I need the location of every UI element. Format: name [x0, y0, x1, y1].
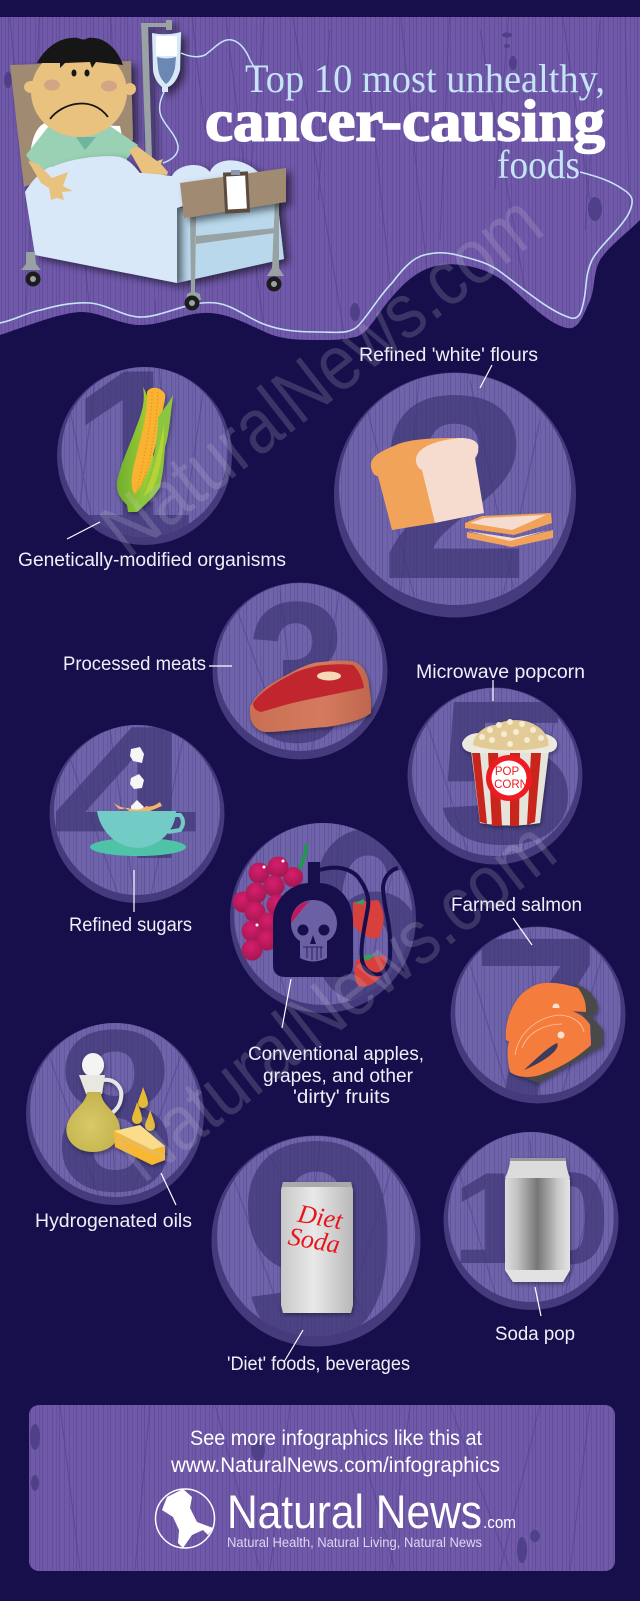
circle 2: refined flours bread: 2: [380, 341, 530, 634]
icon: oil bottle and butter: [66, 1053, 165, 1165]
leader line: [209, 665, 232, 667]
leader line: [133, 870, 135, 912]
circle 6: dirty fruits: [230, 823, 422, 1107]
icon: pillow: [30, 123, 127, 160]
call to action: [170, 1427, 500, 1477]
label: Genetically-modified organisms: [18, 550, 286, 571]
front steak: [508, 1008, 591, 1077]
label: 'Diet' foods, beverages: [227, 1354, 410, 1375]
wordmark: Natural News: [227, 1485, 482, 1538]
label: Microwave popcorn: [416, 662, 585, 683]
icon: strawberries: [353, 899, 386, 987]
label: Soda pop: [495, 1324, 575, 1345]
icon: arms and hands: [28, 146, 168, 200]
circle 3: processed meats: [64, 582, 388, 760]
circle 1: GMO corn: 1: [70, 318, 195, 592]
wavy tube line: [0, 172, 632, 332]
circle 6: dirty fruits: 6: [303, 778, 428, 1052]
watermark top: NaturalNews.com: [84, 177, 558, 573]
call to action: See more infographics like this at: [190, 1427, 482, 1450]
icon: clipboard: [223, 170, 250, 214]
notch: [524, 1043, 558, 1070]
icon: hair: [37, 38, 123, 68]
circle 9: diet foods: 9: [238, 1083, 398, 1401]
circle 2: refined flours bread: [334, 347, 576, 618]
leader line: [480, 365, 492, 388]
back steak: [575, 984, 598, 1022]
leader line: [67, 522, 100, 539]
icon: corn: [117, 387, 173, 512]
leader line: [535, 1287, 541, 1316]
call to action: www.NaturalNews.com/infographics: [170, 1454, 500, 1477]
logo: [156, 1485, 516, 1550]
icon: diet soda can: [281, 1182, 353, 1313]
icon: poison bottle with skull: [273, 862, 398, 977]
title line 3: foods: [497, 142, 580, 187]
leader line: [513, 918, 532, 945]
icon: globe: [156, 1489, 214, 1548]
header panel: [0, 17, 640, 340]
icon: butter: [114, 1131, 165, 1165]
wordmark suffix: .com: [483, 1513, 516, 1532]
label: Conventional apples,: [248, 1044, 424, 1065]
icon: grapes: [232, 846, 306, 960]
icon: skull: [291, 900, 337, 962]
circle 4: refined sugars: 4: [52, 687, 197, 899]
circle 8: hydrogenated oils: [26, 1023, 204, 1231]
leader line: [161, 1173, 176, 1205]
circle 7: farmed salmon: [450, 897, 626, 1104]
icon: steak: [250, 660, 371, 732]
icon: fat spot: [317, 672, 341, 680]
icon: bread loaf: [371, 438, 553, 547]
icon: popcorn kernels: [479, 719, 544, 747]
icon: headboard: [10, 61, 133, 187]
circle 8: hydrogenated oils: 8: [55, 982, 175, 1239]
circle 4: refined sugars: [50, 725, 224, 935]
icon: soda can: [505, 1158, 570, 1282]
icon: bread slices: [467, 530, 553, 547]
icon: IV bag: [152, 32, 181, 92]
popcorn label: POP: [495, 766, 519, 778]
circle 10: soda pop: [444, 1132, 618, 1344]
illustration: patient in hospital bed: [10, 20, 286, 310]
can text: Diet: [295, 1199, 346, 1235]
icon: oil drops: [132, 1087, 155, 1131]
circle 5: microwave popcorn: [408, 664, 584, 864]
label: Refined 'white' flours: [359, 345, 538, 366]
label: Farmed salmon: [451, 895, 582, 916]
can text: Soda: [286, 1222, 342, 1259]
title line 1: Top 10 most unhealthy,: [245, 56, 605, 101]
title: [205, 56, 605, 187]
circle 5: microwave popcorn: 5: [435, 658, 575, 887]
icon: IV tube: [160, 40, 257, 163]
label: Refined sugars: [69, 915, 192, 936]
circle 7: farmed salmon: 7: [472, 887, 600, 1155]
leader line: [492, 680, 494, 701]
label: grapes, and other: [263, 1066, 414, 1087]
title line 2: cancer-causing: [205, 88, 605, 154]
circle 1: GMO corn: [18, 367, 286, 570]
front steak skin: [520, 1014, 603, 1083]
icon: salmon steaks: [506, 983, 603, 1083]
icon: bed legs and wheels: [21, 200, 284, 310]
popcorn label: CORN: [494, 779, 528, 791]
circle 9: diet foods: [212, 1136, 420, 1374]
icon: head: [24, 38, 136, 137]
circle 3: processed meats: 3: [247, 561, 347, 784]
leader line: [284, 1330, 303, 1362]
icon: popcorn bucket: [462, 719, 557, 826]
label: 'dirty' fruits: [293, 1087, 390, 1108]
icon: teacup with sugar cubes: [90, 747, 186, 856]
icon: footboard: [180, 168, 286, 218]
icon: shirt: [26, 126, 138, 175]
footer panel: [29, 1405, 615, 1571]
label: Processed meats: [63, 654, 206, 675]
tagline: Natural Health, Natural Living, Natural News: [227, 1535, 482, 1550]
label: Hydrogenated oils: [35, 1211, 192, 1232]
icon: IV pole: [141, 20, 172, 162]
label: [248, 1044, 424, 1108]
icon: blanket: [25, 156, 258, 283]
icon: side of bed: [177, 198, 284, 283]
circle 10: soda pop: 10: [452, 1145, 610, 1291]
leader line: [282, 979, 291, 1028]
watermark bottom: NaturalNews.com: [99, 803, 571, 1198]
